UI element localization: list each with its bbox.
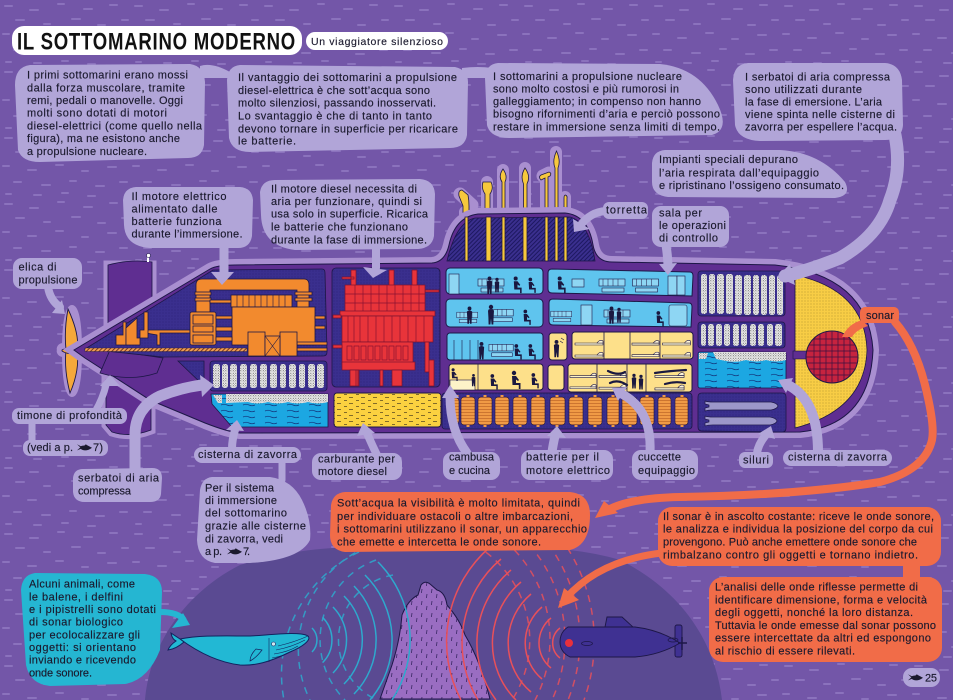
label: batteries — [521, 426, 613, 480]
control room row 2 left — [446, 299, 543, 327]
submarine cutaway — [62, 151, 873, 435]
panel: diesel-electric advantage: molto silenziosi, passando inosservati. — [238, 98, 436, 110]
label: control room: di controllo — [659, 233, 718, 245]
label: propeller — [13, 258, 82, 314]
torpedo bay — [698, 393, 786, 432]
panel: immersion note: a p. — [205, 546, 222, 558]
small submarine with sonar light — [560, 617, 687, 657]
label: stern ballast tank — [194, 420, 301, 463]
panel: nuclear submarines: bisogno rifornimenti d’aria e perciò possono — [493, 109, 720, 121]
air tanks, stern — [178, 361, 327, 391]
panel: visibility: che emette e intercetta le onde sonore. — [337, 537, 541, 549]
panel: animal echolocation: inviando e ricevendo — [29, 655, 136, 667]
panel: echo analysis — [709, 564, 942, 662]
control room row 1 right — [548, 269, 693, 296]
label: electric motor: durante l’immersione. — [132, 229, 242, 241]
diesel engine compartment — [332, 268, 440, 387]
label: sonar with arrow to explanation — [595, 307, 933, 518]
panel: compressed air tanks: zavorra per espellere l’acqua. — [745, 122, 897, 134]
label: sonar with arrow to explanation: sonar — [866, 310, 894, 322]
panel: passive sonar: provengono. Può anche emettere onde sonore che — [663, 537, 917, 549]
shower — [549, 333, 567, 360]
masts through tower — [465, 217, 567, 261]
panel: compressed air tanks — [733, 63, 903, 285]
label: propeller: elica di — [18, 262, 56, 274]
propeller — [62, 309, 78, 393]
subtitle — [306, 32, 448, 50]
panel: echo analysis: L’analisi delle onde riflesse permette di — [715, 582, 918, 594]
whale — [168, 633, 309, 665]
page number badge: 25 — [925, 673, 937, 685]
galley — [449, 364, 543, 390]
label: control room: sala per — [659, 208, 702, 220]
panel: animal echolocation: onde sonore. — [29, 668, 92, 680]
label: crew bunks — [612, 387, 698, 480]
page reference: see p. 7: 7) — [93, 442, 103, 454]
label: diesel engine: usa solo in superficie. Ricarica — [271, 209, 429, 221]
panel: diesel-electric advantage: devono tornare in superficie per ricaricare — [238, 123, 458, 135]
label: propeller: propulsione — [18, 274, 78, 286]
panel: echo analysis: degli oggetti, nonché la loro distanza. — [715, 607, 913, 619]
panel: nuclear submarines: sono molto costosi e più rumorosi in — [493, 84, 679, 96]
label: bow ballast tank: cisterna di zavorra — [788, 452, 888, 464]
label: batteries: batterie per il — [526, 452, 599, 464]
label: torpedoes — [739, 426, 775, 468]
panel: immersion note: di zavorra, vedi — [205, 533, 283, 545]
air tanks, bow lower — [698, 322, 785, 348]
panel: diesel-electric advantage: Il vantaggio dei sottomarini a propulsione — [238, 72, 457, 84]
label: diesel fuel — [312, 423, 402, 480]
ballast tank, stern — [211, 394, 328, 427]
panel: animal echolocation: le balene, i delfini — [29, 591, 123, 603]
panel: diesel-electric advantage: le batterie. — [238, 136, 296, 148]
panel: animal echolocation — [21, 573, 190, 686]
label: batteries: motore elettrico — [526, 465, 610, 477]
panel: air purification: Impianti speciali depurano — [659, 154, 798, 166]
panel: early submarines: figura), ma ne esistono anche — [27, 133, 180, 145]
label: electric motor: batterie funziona — [132, 216, 222, 228]
panel: passive sonar: le analizza e individua la posizione del corpo da cui — [663, 524, 933, 536]
panel: visibility: per individuare ostacoli o altre imbarcazioni, — [337, 511, 573, 523]
periscopes and masts — [459, 151, 567, 262]
washroom — [548, 365, 564, 390]
tower compartment — [447, 217, 595, 261]
panel: echo analysis: identificare dimensione, forma e velocità — [715, 594, 928, 606]
battery bank — [442, 393, 692, 429]
label: electric motor: Il motore elettrico — [132, 191, 226, 203]
crew rooms — [446, 268, 693, 392]
label: diesel fuel: carburante per — [318, 453, 395, 465]
panel: immersion note: di immersione — [205, 495, 277, 507]
bunks row 3 — [572, 332, 693, 359]
panel: animal echolocation: e i pipistrelli sono dotati — [29, 604, 156, 616]
panel: air purification: l’aria respirata dall’equipaggio — [659, 168, 819, 180]
label: torpedoes: siluri — [743, 454, 769, 466]
label: bow ballast tank — [778, 378, 892, 466]
panel: animal echolocation: oggetti: si orientano — [29, 642, 136, 654]
label: galley: cambusa — [449, 452, 495, 464]
panel: compressed air tanks: viene spinta nelle cisterne di — [745, 109, 895, 121]
panel: early submarines — [15, 64, 230, 162]
panel: echo analysis: al rischio di essere rilevati. — [715, 645, 855, 657]
page reference: see p. 7 — [23, 422, 108, 456]
title: IL SOTTOMARINO MODERNO — [17, 28, 296, 56]
panel: immersion note: Per il sistema — [205, 482, 275, 494]
label: diesel fuel: motore diesel — [318, 466, 387, 478]
ballast tank, bow — [698, 352, 786, 388]
panel: nuclear submarines: I sottomarini a propulsione nucleare — [493, 71, 682, 83]
panel: immersion note: 7. — [243, 546, 250, 558]
panel: passive sonar: rimbalzano contro gli oggetti e tornano indietro. — [663, 549, 918, 561]
subtitle: Un viaggiatore silenzioso — [311, 36, 443, 48]
control room row 2 right — [549, 299, 692, 327]
seabed dome with sonar waves — [145, 534, 722, 700]
panel: nuclear submarines — [485, 63, 723, 138]
rock seamount — [380, 582, 490, 699]
panel: animal echolocation: per ecolocalizzare gli — [29, 629, 140, 641]
label: stern ballast tank: cisterna di zavorra — [198, 449, 298, 461]
label: compressed air tanks: compressa — [78, 486, 132, 498]
panel: visibility — [330, 492, 590, 552]
bow sonar dome — [793, 275, 867, 428]
control room row 3 left — [447, 333, 543, 360]
label: galley — [442, 385, 500, 480]
label: compressed air tanks: serbatoi di aria — [78, 473, 160, 485]
panel: early submarines: molti sono dotati di motori — [27, 108, 167, 120]
panel: compressed air tanks: la fase di emersione. L’aria — [745, 96, 883, 108]
panel: passive sonar: Il sonar è in ascolto costante: riceve le onde sonore, — [663, 511, 934, 523]
label: control room: le operazioni — [659, 220, 726, 232]
label: compressed air tanks — [73, 375, 214, 502]
label: diesel engine: Il motore diesel necessita di — [271, 183, 417, 195]
panel: visibility: Sott’acqua la visibilità è molto limitata, quindi — [337, 498, 580, 510]
panel: early submarines: dalla forza muscolare, tramite — [27, 82, 185, 94]
panel: diesel-electric advantage: diesel-elettrica è che sott’acqua sono — [238, 85, 430, 97]
panel: compressed air tanks: I serbatoi di aria compressa — [745, 72, 891, 84]
panel: early submarines: a propulsione nucleare. — [27, 146, 147, 158]
label: diving rudder — [12, 375, 127, 424]
panel: early submarines: diesel-elettrici (come quello nella — [27, 120, 203, 132]
label: diving rudder: timone di profondità — [17, 410, 123, 422]
label: electric motor — [123, 187, 253, 285]
label: crew bunks: equipaggio — [638, 465, 695, 477]
label: tower — [573, 202, 648, 232]
panel: echo analysis: Tuttavia le onde emesse dal sonar possono — [715, 620, 936, 632]
panel: immersion note — [197, 462, 310, 563]
label: diesel engine: aria per funzionare, quindi si — [271, 196, 422, 208]
panel: nuclear submarines: galleggiamento; in compenso non hanno — [493, 96, 701, 108]
page reference: see p. 7: (vedi a p. — [27, 442, 73, 454]
air tanks, bow upper — [698, 271, 785, 316]
panel: diesel-electric advantage: Lo svantaggio è che di tanto in tanto — [238, 110, 432, 122]
electric motor compartment — [85, 269, 327, 357]
diesel fuel tank — [334, 393, 441, 427]
panel: visibility: i sottomarini utilizzano il sonar, un apparecchio — [337, 524, 587, 536]
panel: immersion note: grazie alle cisterne — [205, 520, 306, 532]
label: diesel engine: durante la fase di immersione. — [271, 234, 427, 246]
panel: diesel-electric advantage — [227, 65, 492, 152]
hull — [74, 213, 873, 433]
panel: animal echolocation: di sonar biologico — [29, 616, 123, 628]
page number badge — [903, 668, 940, 687]
label: electric motor: alimentato dalle — [132, 203, 218, 215]
label: crew bunks: cuccette — [638, 452, 681, 464]
label: tower: torretta — [606, 204, 648, 216]
panel: early submarines: I primi sottomarini erano mossi — [27, 70, 188, 82]
label: diesel engine — [260, 179, 435, 278]
rudder fins — [106, 254, 152, 435]
panel: immersion note: del sottomarino — [205, 508, 287, 520]
control room row 1 left — [446, 268, 543, 294]
panel: air purification — [652, 150, 847, 198]
panel: animal echolocation: Alcuni animali, come — [29, 578, 135, 590]
label: control room — [652, 206, 729, 275]
label: galley: e cucina — [449, 465, 491, 477]
bunks row 4 — [568, 364, 692, 392]
panel: compressed air tanks: sono utilizzati durante — [745, 84, 862, 96]
panel: air purification: e ripristinano l’ossigeno consumato. — [659, 180, 844, 192]
panel: passive sonar — [558, 507, 941, 608]
panel: nuclear submarines: restare in immersione senza limiti di tempo. — [493, 121, 720, 133]
diving plane — [100, 350, 163, 378]
panel: early submarines: remi, pedali o manovelle. Oggi — [27, 95, 183, 107]
panel: echo analysis: essere intercettate da altri ed espongono — [715, 633, 931, 645]
label: diesel engine: le batterie che funzionano — [271, 222, 408, 234]
